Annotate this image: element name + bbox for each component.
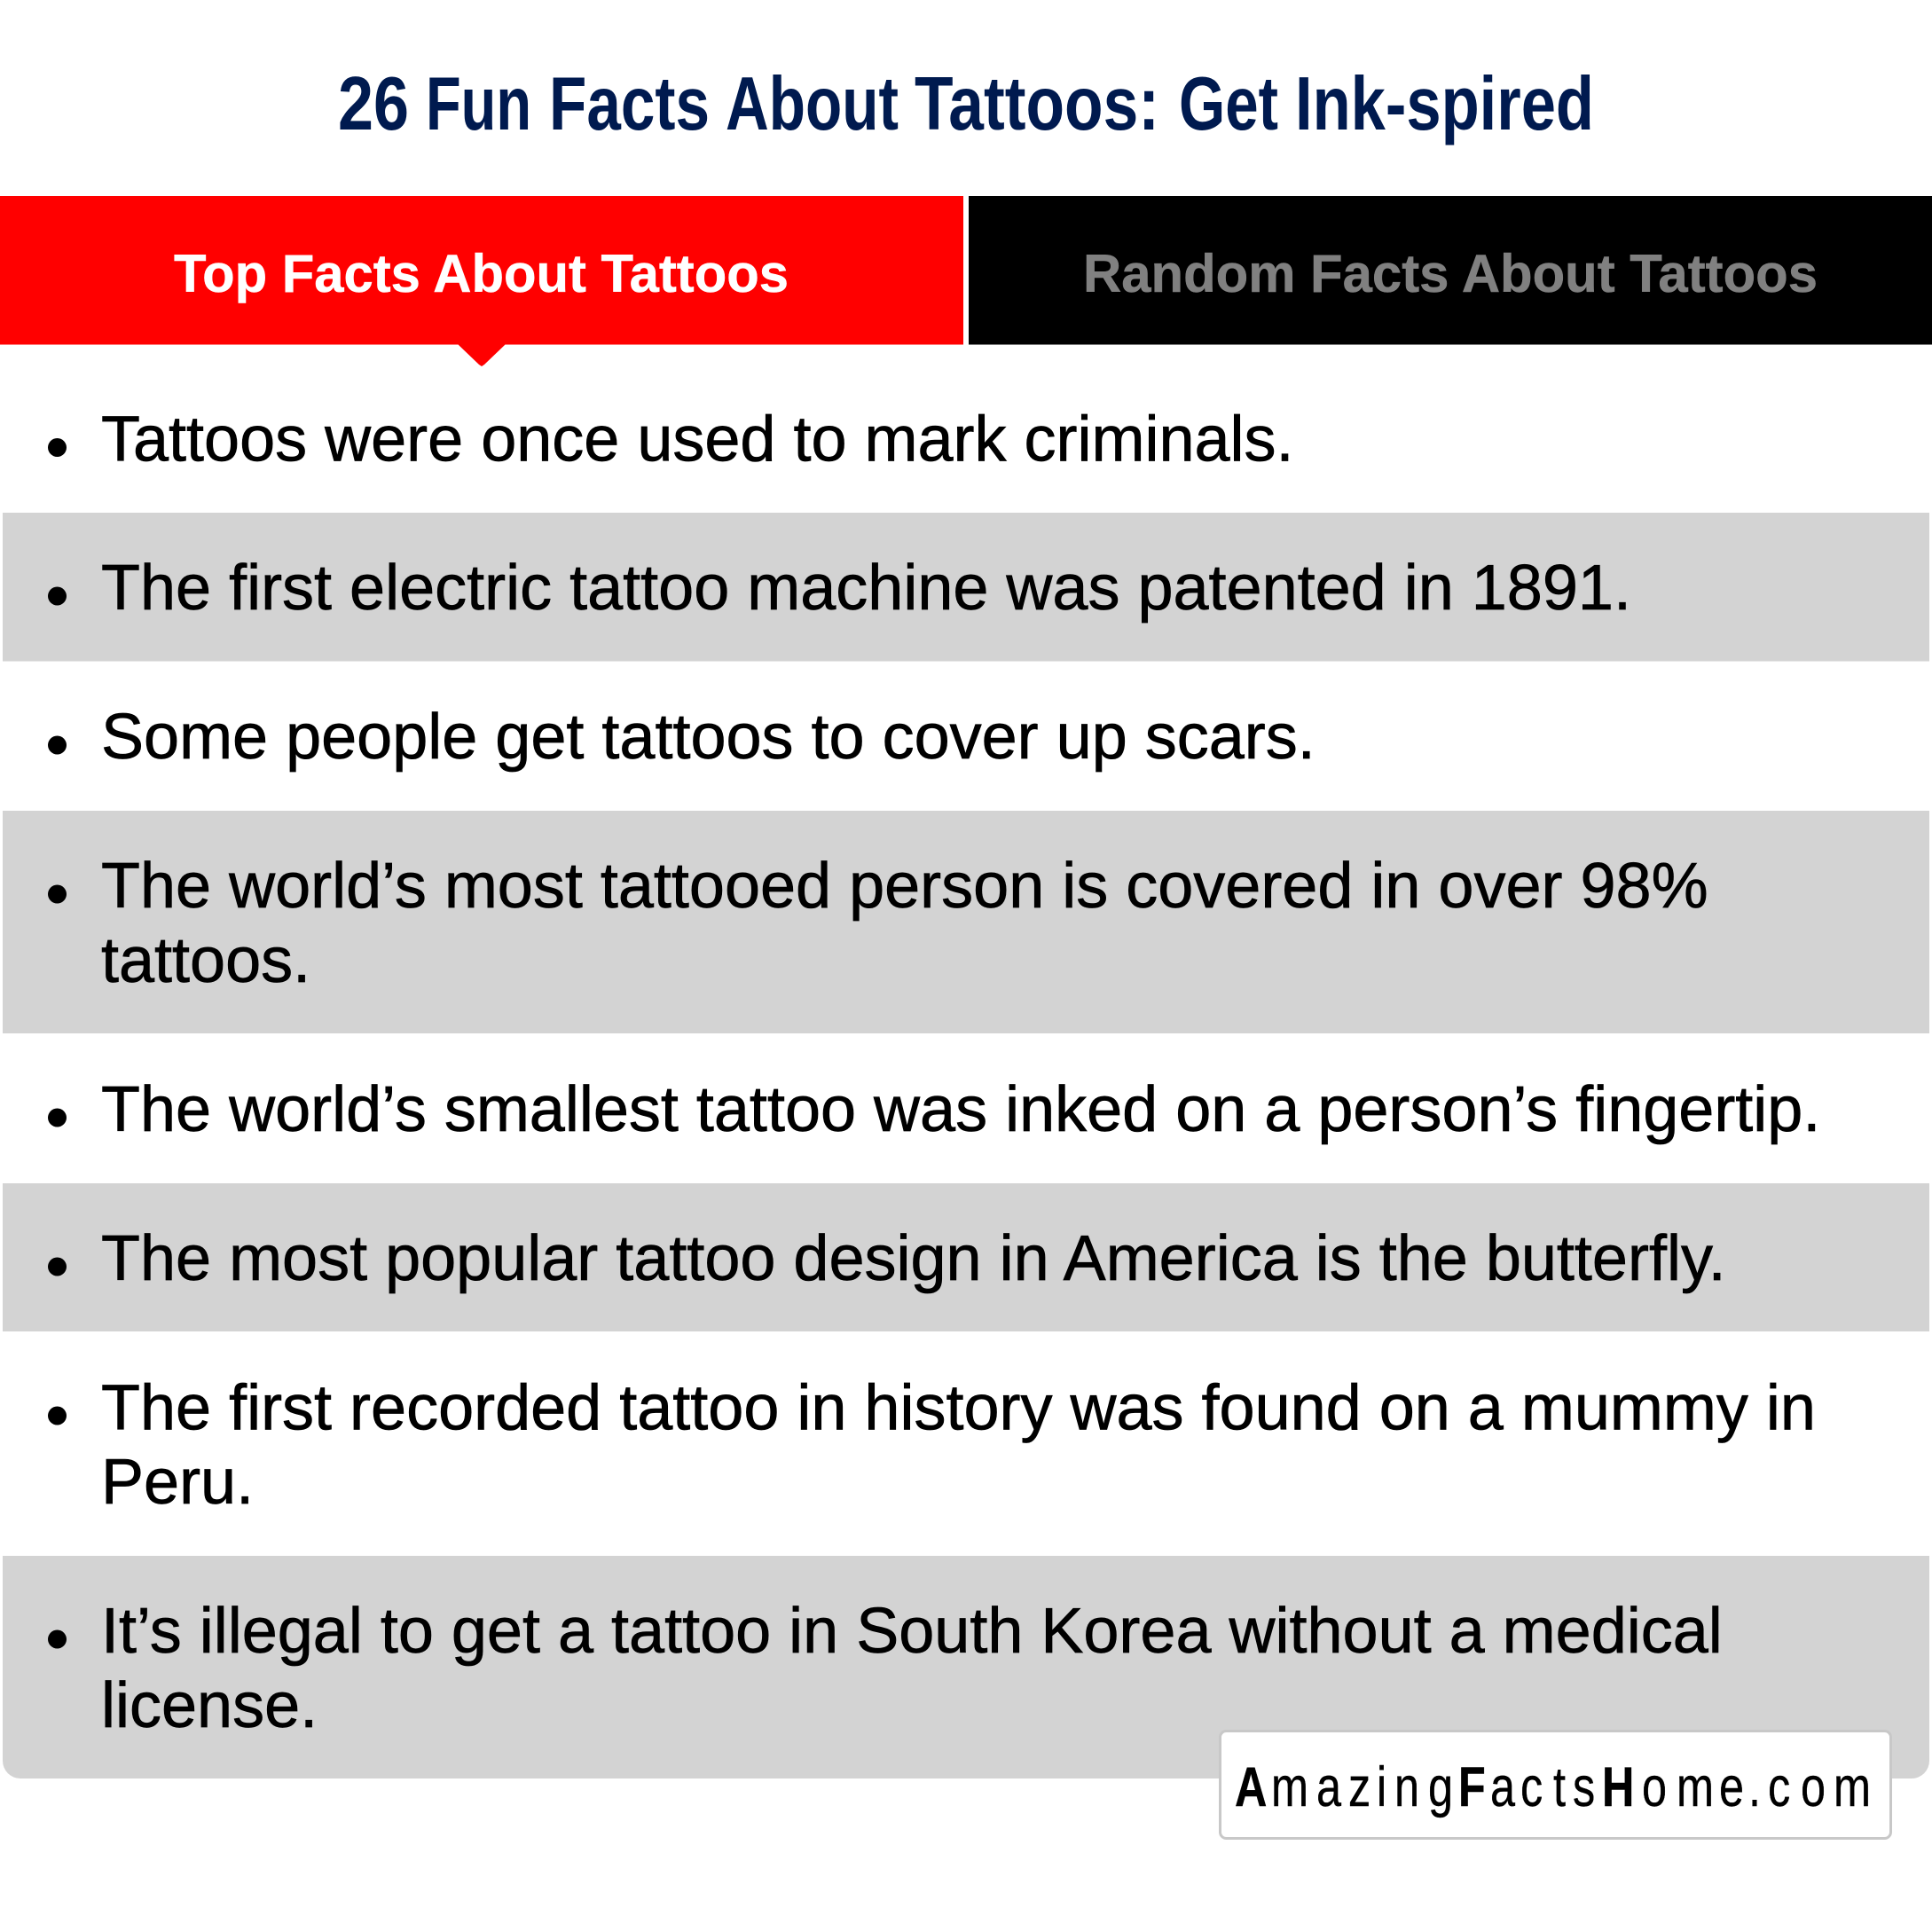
fact 7: Peru. <box>101 1447 254 1518</box>
tab: random facts (inactive) <box>969 196 1932 344</box>
tab: top facts (active): Top Facts About Tattoos <box>174 244 789 303</box>
title <box>338 62 1594 146</box>
fact 3: Some people get tattoos to cover up scars. <box>101 702 1315 773</box>
fact 1: Tattoos were once used to mark criminals. <box>101 404 1294 475</box>
fact 4 row <box>3 811 1929 1033</box>
fact 4 row: The world’s most tattooed person is covered in over 98% <box>101 851 1708 922</box>
tab: top facts (active) <box>0 196 963 366</box>
fact 5: The world’s smallest tattoo was inked on a person’s fingertip. <box>101 1074 1820 1145</box>
watermark badge <box>1221 1731 1891 1838</box>
fact 6 row: The most popular tattoo design in America is the butterfly. <box>101 1223 1726 1294</box>
fact 8 row: license. <box>101 1670 318 1741</box>
title: Fun <box>426 62 531 146</box>
title: Ink-spired <box>1295 62 1594 146</box>
title: Get <box>1179 62 1278 146</box>
fact 7 <box>48 1373 1816 1518</box>
title: Facts <box>549 62 710 146</box>
fact 2 row <box>3 513 1929 662</box>
fact 6 row <box>3 1183 1929 1331</box>
fact 4 row: tattoos. <box>101 925 310 996</box>
title: 26 <box>338 62 409 146</box>
title: Tattoos: <box>915 62 1159 146</box>
fact 8 row <box>3 1556 1929 1778</box>
fact 8 row: It’s illegal to get a tattoo in South Korea without a medical <box>101 1596 1723 1667</box>
fact 7: The first recorded tattoo in history was found on a mummy in <box>101 1373 1816 1444</box>
watermark badge: AmazingFactsHome.com <box>1235 1756 1871 1818</box>
tab: random facts (inactive): Random Facts About Tattoos <box>1083 244 1818 303</box>
fact 2 row: The first electric tattoo machine was patented in 1891. <box>101 553 1631 624</box>
title: About <box>726 62 899 146</box>
